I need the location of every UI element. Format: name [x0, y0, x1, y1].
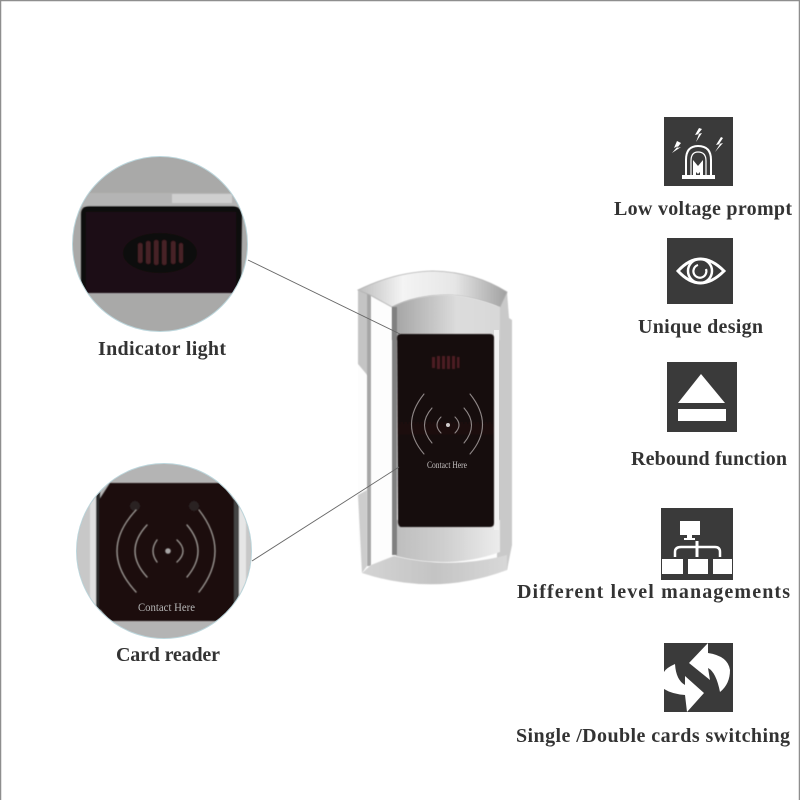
indicator light	[432, 356, 460, 369]
label: single double cards switching: Single /Double cards switching	[516, 725, 790, 747]
icon: level management hierarchy	[661, 508, 733, 580]
panel: card reader magnifier	[76, 464, 254, 638]
panel: indicator light magnifier	[72, 156, 248, 332]
label: indicator light: Indicator light	[98, 338, 226, 360]
lock white body	[358, 271, 512, 584]
product: cabinet lock	[358, 271, 512, 584]
leader line: card reader	[252, 467, 399, 561]
label: unique design: Unique design	[638, 316, 763, 338]
left upper tab	[358, 290, 368, 376]
icon: eye	[667, 238, 733, 304]
left lower tab	[358, 490, 367, 573]
lock bottom base	[362, 555, 507, 584]
icon: rebound eject	[667, 362, 737, 432]
right rail	[497, 292, 512, 570]
lock top cap	[358, 271, 507, 307]
left rail line	[367, 292, 371, 566]
label: card reader: Card reader	[116, 644, 220, 666]
icon: switching arrows	[664, 643, 733, 712]
icon: contactless waves	[117, 510, 215, 592]
leader line: indicator light	[248, 260, 400, 334]
icon: contactless waves	[412, 394, 482, 454]
face bottom	[394, 520, 500, 562]
label: different level managements: Different level managements	[517, 581, 790, 603]
face top	[392, 295, 500, 340]
icon: low voltage alarm	[664, 117, 733, 186]
label: low voltage prompt: Low voltage prompt	[614, 198, 792, 220]
touch panel	[397, 334, 494, 527]
face left strip	[392, 307, 397, 555]
card reader caption: Contact Here	[138, 600, 195, 614]
face right highlight	[494, 330, 499, 530]
lock caption: Contact Here	[427, 460, 467, 470]
label: rebound function: Rebound function	[631, 448, 787, 470]
